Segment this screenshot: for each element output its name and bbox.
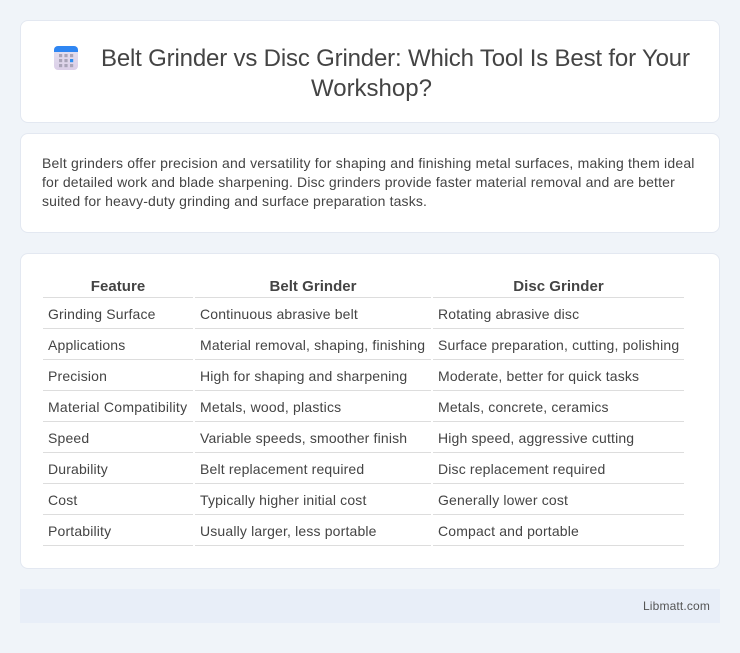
row: Durability: Durability xyxy=(48,461,108,477)
row: Portability: Portability xyxy=(48,523,111,539)
intro text: Belt grinders offer precision and versatility for shaping and finishing metal surfaces, making them ideal xyxy=(42,155,695,171)
row: Portability: Compact and portable xyxy=(438,523,579,539)
row: Speed: Speed xyxy=(48,430,89,446)
panel: header card xyxy=(20,20,720,123)
table header: Disc Grinder: Disc Grinder xyxy=(513,278,604,295)
row: Precision: Precision xyxy=(48,368,107,384)
table header: Feature: Feature xyxy=(91,278,145,295)
row: Cost: Typically higher initial cost xyxy=(200,492,366,508)
row: Grinding Surface: Grinding Surface xyxy=(48,306,156,322)
row: Material Compatibility: Metals, concrete, ceramics xyxy=(438,399,609,415)
row: Applications: Applications xyxy=(48,337,125,353)
panel: comparison table card xyxy=(20,253,720,569)
row: Speed: Variable speeds, smoother finish xyxy=(200,430,407,446)
panel: introduction card xyxy=(20,133,720,233)
row: Durability xyxy=(43,461,684,484)
row: Portability xyxy=(43,523,684,546)
title: Workshop? xyxy=(311,75,432,102)
row: Portability: Usually larger, less portable xyxy=(200,523,377,539)
row: Applications: Material removal, shaping, finishing xyxy=(200,337,425,353)
title: Belt Grinder vs Disc Grinder: Which Tool Is Best for Your xyxy=(101,45,690,72)
row: Durability: Disc replacement required xyxy=(438,461,605,477)
row: Material Compatibility: Material Compatibility xyxy=(48,399,187,415)
intro text xyxy=(42,155,695,209)
row: Grinding Surface: Rotating abrasive disc xyxy=(438,306,579,322)
row: Grinding Surface: Continuous abrasive belt xyxy=(200,306,358,322)
footer bar xyxy=(20,589,720,623)
row: Material Compatibility: Metals, wood, plastics xyxy=(200,399,341,415)
row: Precision: Moderate, better for quick tasks xyxy=(438,368,639,384)
row: Speed: High speed, aggressive cutting xyxy=(438,430,634,446)
row: Durability: Belt replacement required xyxy=(200,461,364,477)
table header: Belt Grinder: Belt Grinder xyxy=(269,278,357,295)
row: Cost: Cost xyxy=(48,492,77,508)
row: Material Compatibility xyxy=(43,399,684,422)
intro text: for detailed work and blade sharpening. Disc grinders provide faster material removal and are better xyxy=(42,174,675,190)
title xyxy=(101,45,690,102)
row: Precision xyxy=(43,368,684,391)
row: Cost xyxy=(43,492,684,515)
row: Precision: High for shaping and sharpening xyxy=(200,368,407,384)
icon: calendar xyxy=(54,46,78,70)
row: Applications xyxy=(43,337,684,360)
row: Speed xyxy=(43,430,684,453)
row: Applications: Surface preparation, cutting, polishing xyxy=(438,337,679,353)
intro text: suited for heavy-duty grinding and surface preparation tasks. xyxy=(42,193,427,209)
row: Grinding Surface xyxy=(43,306,684,329)
footer text: Libmatt.com xyxy=(643,599,710,613)
row: Cost: Generally lower cost xyxy=(438,492,568,508)
